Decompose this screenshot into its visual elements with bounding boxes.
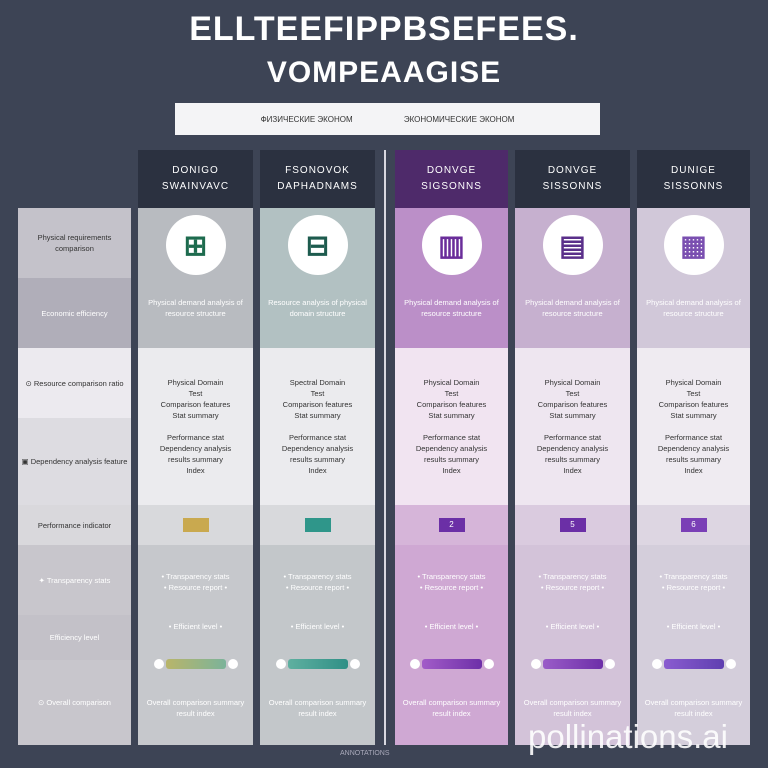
label column: ⊙ Overall comparison xyxy=(38,698,111,707)
icon: col2 xyxy=(288,215,348,275)
column 2: FSONOVOK xyxy=(285,165,350,176)
column 5: • Efficient level • xyxy=(667,622,720,631)
column 3: Index xyxy=(442,466,461,475)
column 3: Dependency analysis xyxy=(416,444,487,453)
column 2: Spectral Domain xyxy=(290,378,345,387)
column 1: Index xyxy=(186,466,205,475)
column 2: Performance stat xyxy=(289,433,346,442)
column 5: result index xyxy=(674,709,713,718)
column 4: Physical demand analysis of resource structure xyxy=(525,298,620,318)
column 5: Physical demand analysis of resource structure xyxy=(646,298,741,318)
column 4: Index xyxy=(563,466,582,475)
column 5: Stat summary xyxy=(670,411,717,420)
column 1: result index xyxy=(176,709,215,718)
column 4: • Efficient level • xyxy=(546,622,599,631)
column 5: Physical Domain xyxy=(666,378,721,387)
column 5 xyxy=(637,150,750,745)
column 4: Stat summary xyxy=(549,411,596,420)
column 2: Resource analysis of physical domain structure xyxy=(268,298,367,318)
column 5: • Resource report • xyxy=(662,583,725,592)
column 3: Overall comparison summary xyxy=(403,698,500,707)
column 2: Index xyxy=(308,466,327,475)
column 3: result index xyxy=(432,709,471,718)
column 4: Test xyxy=(566,389,579,398)
column 5: DUNIGE xyxy=(671,165,716,176)
column 5: Comparison features xyxy=(659,400,728,409)
column 3: DONVGE xyxy=(427,165,476,176)
label column: ✦ Transparency stats xyxy=(39,576,110,584)
column 2: results summary xyxy=(290,455,345,464)
column 2: Overall comparison summary xyxy=(269,698,366,707)
column 2: • Resource report • xyxy=(286,583,349,592)
column 5: • Transparency stats xyxy=(659,572,728,581)
watermark: pollinations.ai xyxy=(528,718,728,755)
subtitle bar xyxy=(175,103,600,135)
column 3: SIGSONNS xyxy=(421,181,482,192)
column 2: DAPHADNAMS xyxy=(277,181,358,192)
column 4 xyxy=(515,150,630,745)
icon: col4: ▤ xyxy=(559,230,586,260)
column 4: Physical Domain xyxy=(545,378,600,387)
column 3: Physical Domain xyxy=(424,378,479,387)
column 1: Physical Domain xyxy=(168,378,223,387)
column 3: Test xyxy=(445,389,458,398)
column 2: Comparison features xyxy=(283,400,352,409)
column 2: • Transparency stats xyxy=(283,572,352,581)
icon: col1: ⊞ xyxy=(184,230,207,260)
label column: Performance indicator xyxy=(38,520,111,530)
column 3: Performance stat xyxy=(423,433,480,442)
column 2: Dependency analysis xyxy=(282,444,353,453)
column 5: SISSONNS xyxy=(664,181,723,192)
column 5: Overall comparison summary xyxy=(645,698,742,707)
column 5: Dependency analysis xyxy=(658,444,729,453)
icon: col1 xyxy=(166,215,226,275)
title xyxy=(189,10,579,89)
column 4: Comparison features xyxy=(538,400,607,409)
column 1: DONIGO xyxy=(172,165,219,176)
icon: col5: ▦ xyxy=(680,230,707,260)
label column: ⊙ Resource comparison ratio xyxy=(26,378,124,388)
icon: col3 xyxy=(422,215,482,275)
icon: col2: ⊟ xyxy=(306,230,329,260)
column 5: results summary xyxy=(666,455,721,464)
column 3: Stat summary xyxy=(428,411,475,420)
divider xyxy=(384,150,386,745)
column 1: Stat summary xyxy=(172,411,219,420)
column 4: results summary xyxy=(545,455,600,464)
column 3: • Transparency stats xyxy=(417,572,486,581)
column 4: • Transparency stats xyxy=(538,572,607,581)
column 5: Test xyxy=(687,389,700,398)
column 3: Comparison features xyxy=(417,400,486,409)
title: ELLTEEFIPPBSEFEES. xyxy=(189,10,579,48)
column 2: Test xyxy=(311,389,324,398)
column 4: SISSONNS xyxy=(543,181,602,192)
column 3: • Resource report • xyxy=(420,583,483,592)
column 4: Dependency analysis xyxy=(537,444,608,453)
label column xyxy=(18,208,131,745)
column 4: Overall comparison summary xyxy=(524,698,621,707)
label column: ▣ Dependency analysis feature xyxy=(22,457,127,466)
column 1: • Efficient level • xyxy=(169,622,222,631)
column 1: Dependency analysis xyxy=(160,444,231,453)
column 3: 2 xyxy=(449,520,454,529)
column 4: result index xyxy=(553,709,592,718)
column 4: 5 xyxy=(570,520,575,529)
icon: col5 xyxy=(664,215,724,275)
column 4: DONVGE xyxy=(548,165,597,176)
column 2: • Efficient level • xyxy=(291,622,344,631)
column 5: Index xyxy=(684,466,703,475)
column 4: • Resource report • xyxy=(541,583,604,592)
column 3 xyxy=(395,150,508,745)
column 2 xyxy=(260,150,375,745)
column 3: results summary xyxy=(424,455,479,464)
column 1: Overall comparison summary xyxy=(147,698,244,707)
column 1: • Transparency stats xyxy=(161,572,230,581)
column 1: Performance stat xyxy=(167,433,224,442)
footer note: ANNOTATIONS xyxy=(340,750,390,757)
column 1: Comparison features xyxy=(161,400,230,409)
column 3: Physical demand analysis of resource structure xyxy=(404,298,499,318)
column 2: Stat summary xyxy=(294,411,341,420)
column 1: Test xyxy=(189,389,202,398)
column 1: SWAINVAVC xyxy=(162,181,229,192)
label column: Efficiency level xyxy=(50,633,99,642)
column 3: • Efficient level • xyxy=(425,622,478,631)
subtitle bar: ЭКОНОМИЧЕСКИЕ ЭКОНОМ xyxy=(404,114,514,124)
column 2: result index xyxy=(298,709,337,718)
label column: Physical requirements comparison xyxy=(38,233,111,253)
label column: Economic efficiency xyxy=(41,308,108,318)
column 4: Performance stat xyxy=(544,433,601,442)
column 1: • Resource report • xyxy=(164,583,227,592)
title: VOMPEAAGISE xyxy=(267,56,501,89)
column 5: 6 xyxy=(691,520,696,529)
column 1 xyxy=(138,150,253,745)
column 1: Physical demand analysis of resource structure xyxy=(148,298,243,318)
icon: col4 xyxy=(542,215,602,275)
column 1: results summary xyxy=(168,455,223,464)
icon: col3: ▥ xyxy=(438,230,465,260)
column 5: Performance stat xyxy=(665,433,722,442)
subtitle bar: ФИЗИЧЕСКИЕ ЭКОНОМ xyxy=(261,114,353,124)
